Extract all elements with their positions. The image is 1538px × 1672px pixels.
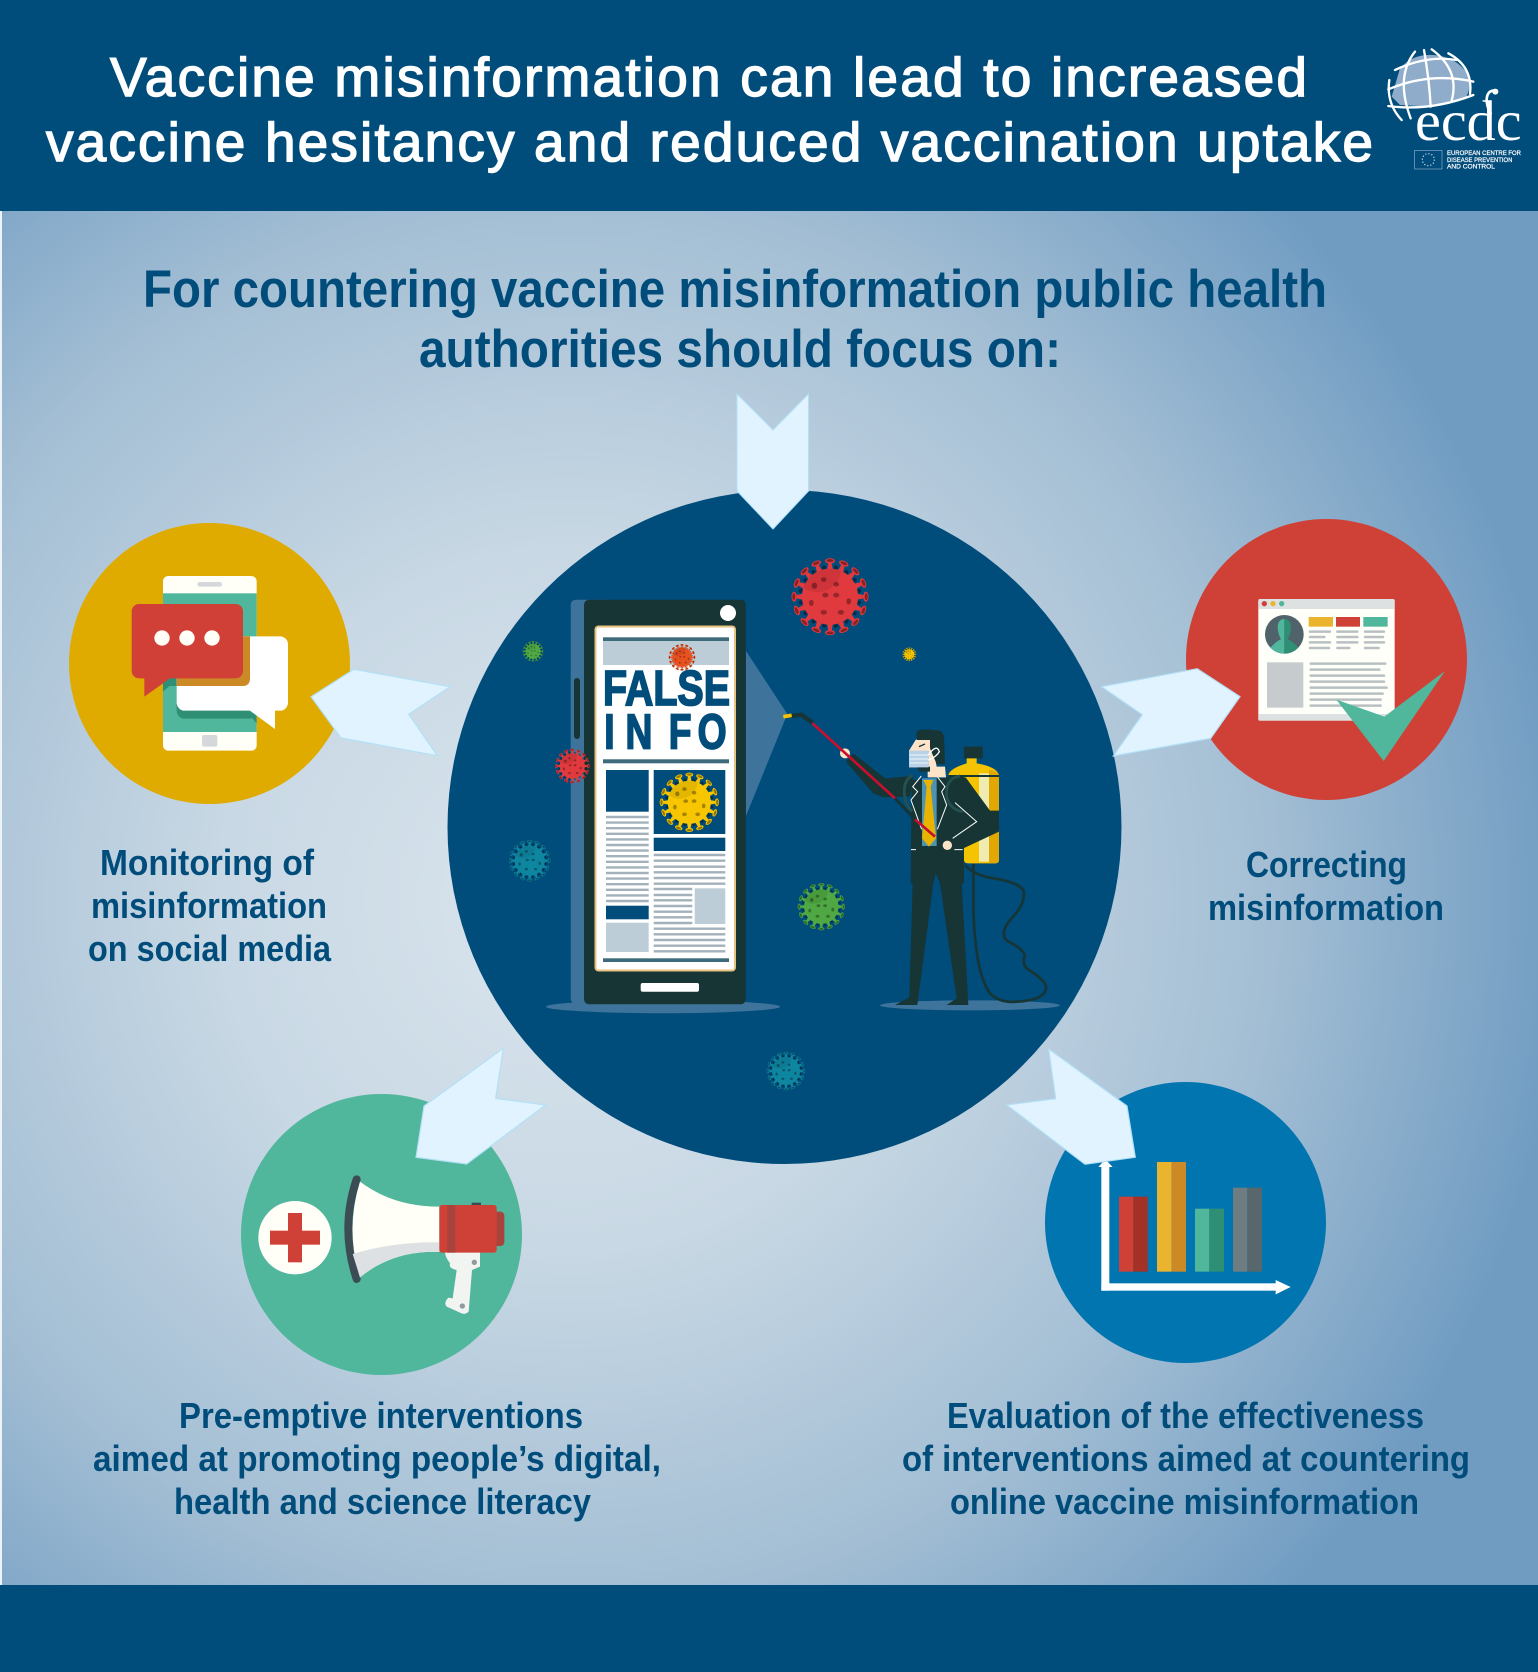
ecdc logo	[1388, 49, 1522, 171]
panel: pre-emptive interventions	[241, 1094, 522, 1375]
arrow: to monitoring	[311, 669, 450, 756]
panel: monitoring social media	[69, 523, 350, 804]
spray beam	[746, 651, 787, 816]
ecdc logo: DISEASE PREVENTION	[1447, 158, 1512, 164]
subheading: For countering vaccine misinformation public health	[143, 260, 1327, 319]
label: correcting: Correcting	[1246, 844, 1407, 885]
icon: megaphone and medical cross	[258, 1179, 504, 1314]
label: evaluation: online vaccine misinformation	[950, 1481, 1419, 1522]
title: vaccine hesitancy and reduced vaccination uptake	[46, 111, 1373, 173]
subheading: authorities should focus on:	[419, 320, 1061, 379]
label: monitoring: Monitoring of	[100, 842, 315, 883]
false info headline	[603, 662, 730, 760]
ecdc logo: EUROPEAN CENTRE FOR	[1447, 151, 1522, 157]
label: evaluation	[902, 1395, 1470, 1522]
arrow: to correcting	[1102, 669, 1240, 756]
arrow: to pre-emptive	[416, 1048, 546, 1164]
false info headline: INFO	[604, 706, 727, 760]
arrow: top	[737, 394, 808, 529]
label: pre-emptive: Pre-emptive interventions	[179, 1395, 583, 1436]
subheading	[143, 260, 1327, 379]
label: pre-emptive: health and science literacy	[174, 1481, 591, 1522]
man spraying with backpack	[783, 715, 1060, 1010]
label: evaluation: Evaluation of the effectiveness	[947, 1395, 1424, 1436]
label: correcting	[1208, 844, 1444, 928]
label: correcting: misinformation	[1208, 887, 1444, 928]
ecdc logo: ecdc	[1415, 90, 1522, 153]
label: pre-emptive	[93, 1395, 661, 1522]
false info headline: FALSE	[603, 662, 730, 716]
label: monitoring	[88, 842, 332, 969]
blue circle	[1045, 1082, 1326, 1363]
label: pre-emptive: aimed at promoting people’s digital,	[93, 1438, 661, 1479]
red circle	[1186, 519, 1467, 800]
ecdc logo: AND CONTROL	[1447, 165, 1496, 171]
icon: web page with check mark	[1258, 599, 1445, 761]
title	[46, 46, 1373, 173]
title: Vaccine misinformation can lead to increased	[110, 46, 1307, 108]
label: monitoring: on social media	[88, 928, 332, 969]
central circle	[448, 490, 1122, 1164]
label: monitoring: misinformation	[91, 885, 327, 926]
header band	[0, 0, 1538, 211]
footer band	[0, 1585, 1538, 1672]
green circle	[241, 1094, 522, 1375]
viruses	[509, 558, 916, 1090]
panel: correcting misinformation	[1186, 519, 1467, 800]
yellow circle	[69, 523, 350, 804]
arrow: to evaluation	[1007, 1049, 1135, 1164]
icon: phone with chat bubbles	[132, 576, 288, 751]
label: evaluation: of interventions aimed at countering	[902, 1438, 1470, 1479]
icon: bar chart	[1098, 1159, 1291, 1294]
panel: evaluation	[1045, 1082, 1326, 1363]
phone with false info newspaper	[546, 600, 780, 1013]
